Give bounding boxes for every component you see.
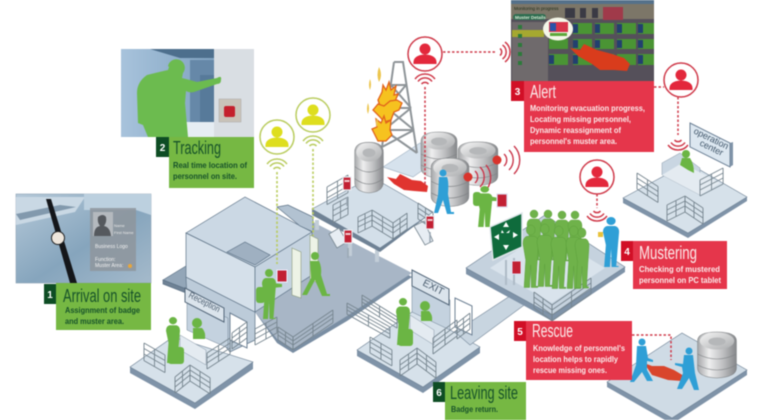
badge photo xyxy=(16,194,151,283)
alert beacon at rig xyxy=(408,37,510,186)
caption xyxy=(169,137,254,188)
panel 4: mustering xyxy=(621,241,727,289)
mustering platform xyxy=(466,215,625,321)
panel 2: tracking xyxy=(121,49,254,188)
beacon 2 xyxy=(296,98,330,236)
badge photo: Name xyxy=(114,223,125,228)
blue worker xyxy=(434,170,454,214)
rescue link xyxy=(632,335,671,360)
red alert beacons xyxy=(408,37,698,221)
operation center sign xyxy=(690,123,733,167)
monitoring screenshot: Monitoring in progress xyxy=(514,6,559,11)
number 6: 6 xyxy=(436,388,442,399)
panel 3: alert: Alert xyxy=(530,82,556,102)
blue supervisor with tablet xyxy=(598,217,619,267)
main floor xyxy=(255,222,412,353)
alert beacon at muster xyxy=(580,160,614,221)
walkway to mustering area xyxy=(455,296,531,345)
casualty at fire xyxy=(387,174,428,192)
panel 5: rescue: location helps to rapidly xyxy=(533,354,618,364)
green people at reception and gate xyxy=(166,252,432,364)
fire xyxy=(367,67,402,141)
number 3: 3 xyxy=(515,87,521,98)
badge photo: Function: xyxy=(95,257,116,263)
railings xyxy=(144,295,470,394)
oil rig tower xyxy=(382,62,440,177)
red alarm beacons xyxy=(464,146,520,192)
number 5: 5 xyxy=(517,327,523,338)
operation center sign: operation xyxy=(692,126,730,151)
panel 1: arrival on site: Assignment of badge xyxy=(65,305,140,315)
exit desk and sign: EXIT xyxy=(421,278,445,298)
operation center sign: center xyxy=(698,138,725,158)
exit platform xyxy=(357,310,480,393)
alert beacon at operation center xyxy=(654,63,698,150)
number 3 xyxy=(511,81,524,101)
main building xyxy=(163,197,313,352)
panel 5: rescue: Rescue xyxy=(532,321,573,341)
tank deck platform xyxy=(312,158,434,262)
reception desk and sign: Reception xyxy=(187,290,222,314)
caption xyxy=(56,283,151,330)
caption xyxy=(524,81,654,152)
panel 3: alert xyxy=(511,0,654,152)
mustered crowd xyxy=(523,210,589,288)
badge photo: Muster Area: xyxy=(95,263,123,269)
green worker at call point xyxy=(473,186,499,227)
number 1: 1 xyxy=(47,290,53,301)
panel 1: arrival on site: Arrival on site xyxy=(63,286,141,306)
call point box xyxy=(497,194,507,207)
rescue platform xyxy=(607,333,747,420)
storage tanks xyxy=(355,132,498,206)
badge photo: First Name xyxy=(114,230,134,235)
number 2: 2 xyxy=(160,143,166,154)
operator xyxy=(680,150,694,173)
panel 3: alert: personnel's muster area. xyxy=(530,136,617,146)
panel 3: alert: Monitoring evacuation progress, xyxy=(530,103,645,113)
gate antennas xyxy=(292,235,318,298)
panel 4: mustering: Mustering xyxy=(639,243,697,263)
reception desk and sign xyxy=(180,288,247,365)
exit desk and sign xyxy=(410,270,472,345)
panel 4: mustering: personnel on PC tablet xyxy=(639,275,721,285)
panel 2: tracking: Tracking xyxy=(173,138,221,158)
panel 1: arrival on site: and muster area. xyxy=(65,316,124,326)
panel 6: leaving site: Badge return. xyxy=(451,404,498,414)
badge photo: Business Logo xyxy=(95,244,128,250)
panel 2: tracking: Real time location of xyxy=(173,160,247,170)
panel 3: alert: Dynamic reassignment of xyxy=(530,125,621,135)
monitoring screenshot: Muster Details xyxy=(515,15,546,20)
muster sign xyxy=(490,213,522,285)
rescue team carrying casualty xyxy=(630,338,699,390)
panel 3: alert: Locating missing personnel, xyxy=(530,114,631,124)
panel 5: rescue xyxy=(514,321,632,380)
panel 6: leaving site xyxy=(433,382,526,420)
operation center platform xyxy=(623,153,747,238)
tracking photo xyxy=(121,49,254,137)
panel 2: tracking: personnel on site. xyxy=(173,171,237,181)
panel 1: arrival on site xyxy=(16,194,151,330)
panel 5: rescue: Knowledge of personnel's xyxy=(533,343,625,353)
beacon 1 xyxy=(260,120,294,264)
number 4: 4 xyxy=(624,247,630,258)
panel 5: rescue: rescue missing ones. xyxy=(533,365,607,375)
red badge reader at building xyxy=(277,270,287,282)
panel 6: leaving site: Leaving site xyxy=(450,383,518,403)
monitoring screenshot xyxy=(511,0,654,81)
reception platform xyxy=(130,337,253,409)
yellow tracking beacons xyxy=(260,98,330,264)
rescue tank xyxy=(698,332,736,378)
panel 4: mustering: Checking of mustered xyxy=(639,264,720,274)
